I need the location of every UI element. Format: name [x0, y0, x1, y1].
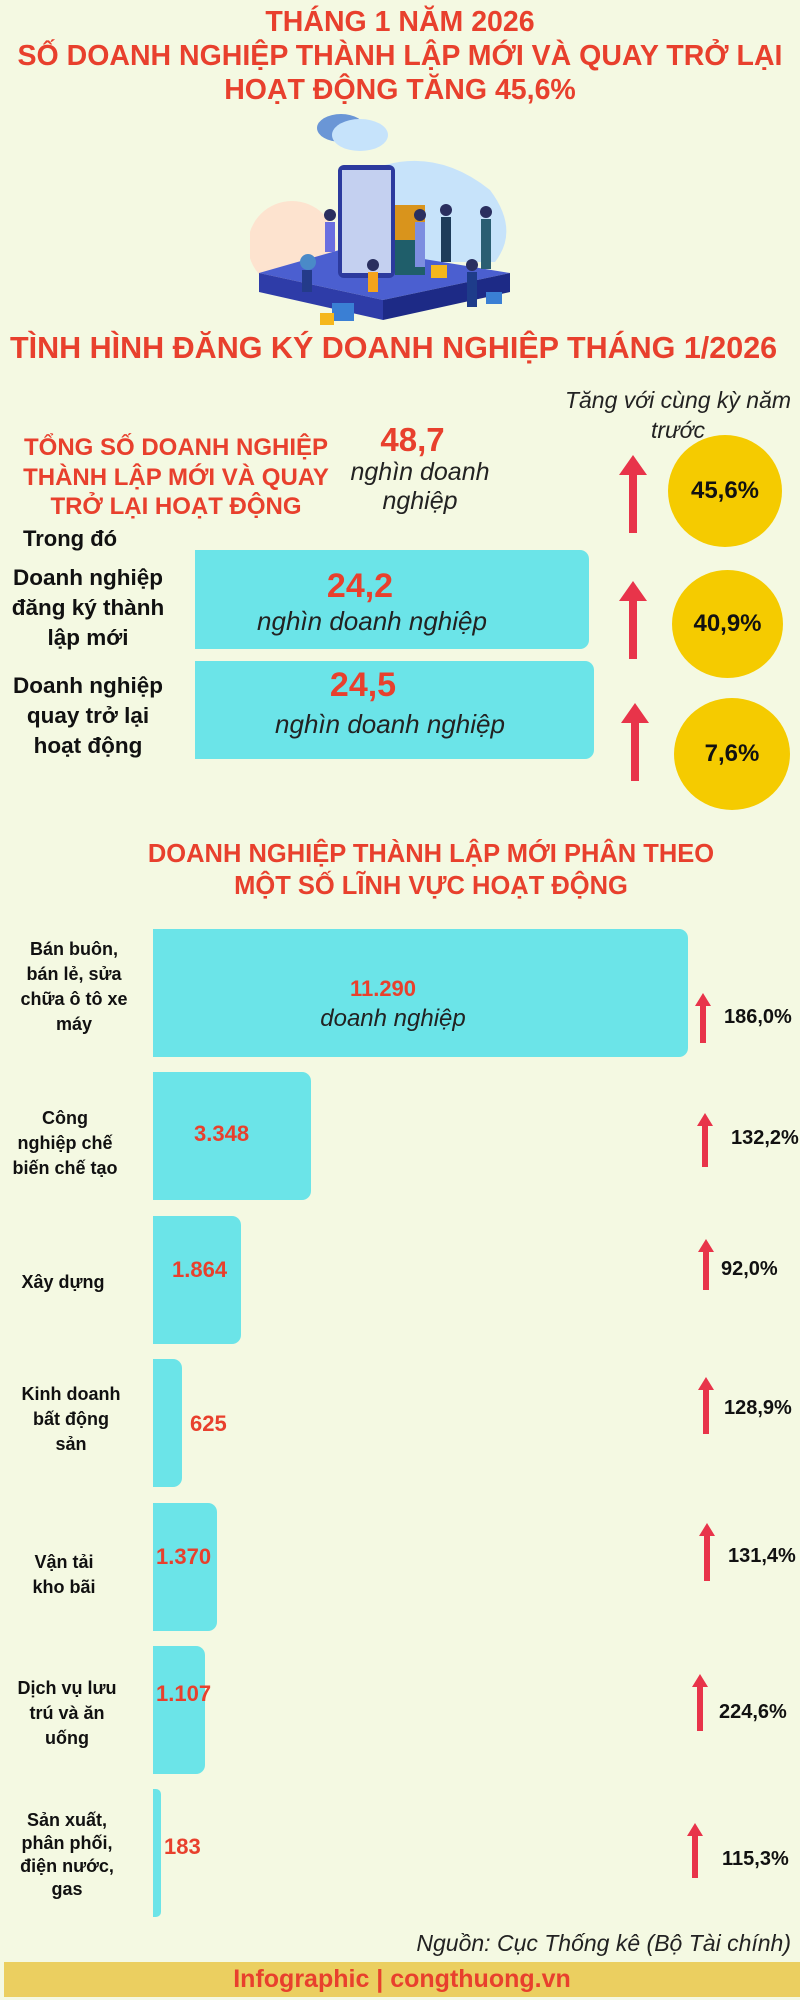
row 1 label: chữa ô tô xe [20, 989, 128, 1009]
row 6 value: 1.107 [156, 1681, 211, 1706]
row 6 bar [153, 1646, 205, 1774]
row 2 label: nghiệp chế [17, 1133, 112, 1153]
arrow 3 [621, 703, 649, 781]
total value: nghìn doanh [350, 458, 490, 486]
row 5 bar [153, 1503, 217, 1631]
arrow 1 [619, 455, 647, 533]
row 7 pct: 115,3% [722, 1848, 789, 1870]
row 2 label: Công [42, 1108, 88, 1128]
row 5 label: Vận tải [34, 1552, 94, 1572]
row 6 label [17, 1678, 117, 1748]
row 5 label [32, 1552, 96, 1597]
row 1 label: máy [56, 1014, 92, 1034]
heading: by sector [148, 838, 714, 900]
box: 24,2: 24,2 [327, 567, 393, 605]
row 3 value: 1.864 [172, 1257, 227, 1282]
total label: TỔNG SỐ DOANH NGHIỆP [24, 434, 328, 461]
row 5 label: kho bãi [32, 1577, 96, 1597]
row 7 label: phân phối, [22, 1833, 112, 1853]
title: SỐ DOANH NGHIỆP THÀNH LẬP MỚI VÀ QUAY TRỞ LẠI [18, 40, 782, 72]
row 4 label: Kinh doanh [22, 1384, 120, 1404]
source: Nguồn: Cục Thống kê (Bộ Tài chính) [416, 1930, 791, 1956]
row 2 arrow [697, 1113, 713, 1167]
row 7 label: điện nước, [20, 1856, 114, 1876]
label: new registered [12, 565, 164, 650]
title: HOẠT ĐỘNG TĂNG 45,6% [224, 74, 576, 106]
caption: growth vs same period: Tăng với cùng kỳ năm [565, 387, 791, 413]
total label: THÀNH LẬP MỚI VÀ QUAY [23, 464, 329, 490]
title: THÁNG 1 NĂM 2026 [265, 6, 535, 38]
caption: growth vs same period: trước [651, 417, 705, 443]
total label: TRỞ LẠI HOẠT ĐỘNG [50, 493, 302, 520]
box: 24,5: 24,5 [330, 666, 396, 704]
row 1 bar [153, 929, 688, 1057]
heading: by sector: DOANH NGHIỆP THÀNH LẬP MỚI PHÂN THEO [148, 840, 714, 868]
label: returned [13, 673, 163, 758]
circle 7,6% [674, 698, 790, 810]
row 4 label: sản [55, 1434, 87, 1454]
total label [23, 433, 329, 520]
row 5 pct: 131,4% [728, 1545, 796, 1567]
circle 7,6%: 7,6% [705, 740, 759, 767]
row 1 arrow [695, 993, 711, 1043]
title [18, 6, 782, 106]
row 6 label: uống [45, 1728, 89, 1748]
row 6 label: Dịch vụ lưu [17, 1678, 117, 1698]
row 4 label: bất động [33, 1409, 109, 1429]
row 7 label: Sản xuất, [27, 1810, 107, 1830]
row 6 label: trú và ăn [29, 1703, 105, 1723]
row 7 arrow [687, 1823, 703, 1878]
row 3 label: Xây dựng [21, 1272, 105, 1292]
arrow 2 [619, 581, 647, 659]
label: new registered: lập mới [47, 625, 128, 650]
footer bar: Infographic | congthuong.vn [233, 1965, 571, 1993]
circle 45,6% [668, 435, 782, 547]
label: returned: hoạt động [34, 733, 142, 758]
row 3 pct: 92,0% [721, 1258, 778, 1280]
illustration: business people around phone [250, 114, 510, 325]
row 4 bar [153, 1359, 182, 1487]
box: 24,5: nghìn doanh nghiệp [275, 709, 505, 739]
row 2 pct: 132,2% [731, 1127, 799, 1149]
row 2 bar [153, 1072, 311, 1200]
row 2 label: biến chế tạo [12, 1158, 118, 1178]
row 1 bar: 11.290 [350, 976, 416, 1001]
row 3 arrow [698, 1239, 714, 1290]
row 4 value: 625 [190, 1411, 227, 1436]
total value: 48,7 [380, 421, 445, 458]
row 7 value: 183 [164, 1834, 201, 1859]
row 4 label [22, 1384, 120, 1454]
circle 40,9% [672, 570, 783, 678]
box: 24,5 [195, 661, 594, 759]
total value: nghiệp [382, 487, 458, 515]
row 5 value: 1.370 [156, 1544, 211, 1569]
box: 24,2: nghìn doanh nghiệp [257, 606, 487, 636]
circle 45,6%: 45,6% [691, 477, 759, 504]
row 5 arrow [699, 1523, 715, 1581]
row 7 label: gas [51, 1879, 83, 1899]
row 6 pct: 224,6% [719, 1701, 787, 1723]
row 4 arrow [698, 1377, 714, 1434]
heading: by sector: MỘT SỐ LĨNH VỰC HOẠT ĐỘNG [234, 872, 628, 900]
row 7 label [20, 1810, 114, 1899]
circle 40,9%: 40,9% [693, 610, 762, 637]
total value [350, 421, 490, 515]
label: new registered: Doanh nghiệp [13, 565, 163, 590]
label: new registered: đăng ký thành [12, 595, 164, 620]
row 6 arrow [692, 1674, 708, 1731]
row 3 bar [153, 1216, 241, 1344]
heading: registration status: TÌNH HÌNH ĐĂNG KÝ DOANH NGHIỆP THÁNG 1/2026 [10, 331, 777, 365]
label: returned: quay trở lại [27, 703, 149, 728]
box: 24,2 [195, 550, 589, 649]
row 2 value: 3.348 [194, 1121, 249, 1146]
row 1 label: bán lẻ, sửa [26, 964, 122, 984]
footer bar [4, 1962, 800, 1997]
label: returned: Doanh nghiệp [13, 673, 163, 698]
row 4 pct: 128,9% [724, 1397, 792, 1419]
row 2 label [12, 1108, 118, 1178]
caption: growth vs same period [565, 387, 791, 443]
text: Trong đó: Trong đó [23, 526, 117, 551]
row 1 bar: doanh nghiệp [320, 1005, 466, 1032]
row 1 label: Bán buôn, [30, 939, 118, 959]
row 1 pct: 186,0% [724, 1006, 792, 1028]
row 7 bar [153, 1789, 161, 1917]
row 1 label [20, 939, 128, 1034]
